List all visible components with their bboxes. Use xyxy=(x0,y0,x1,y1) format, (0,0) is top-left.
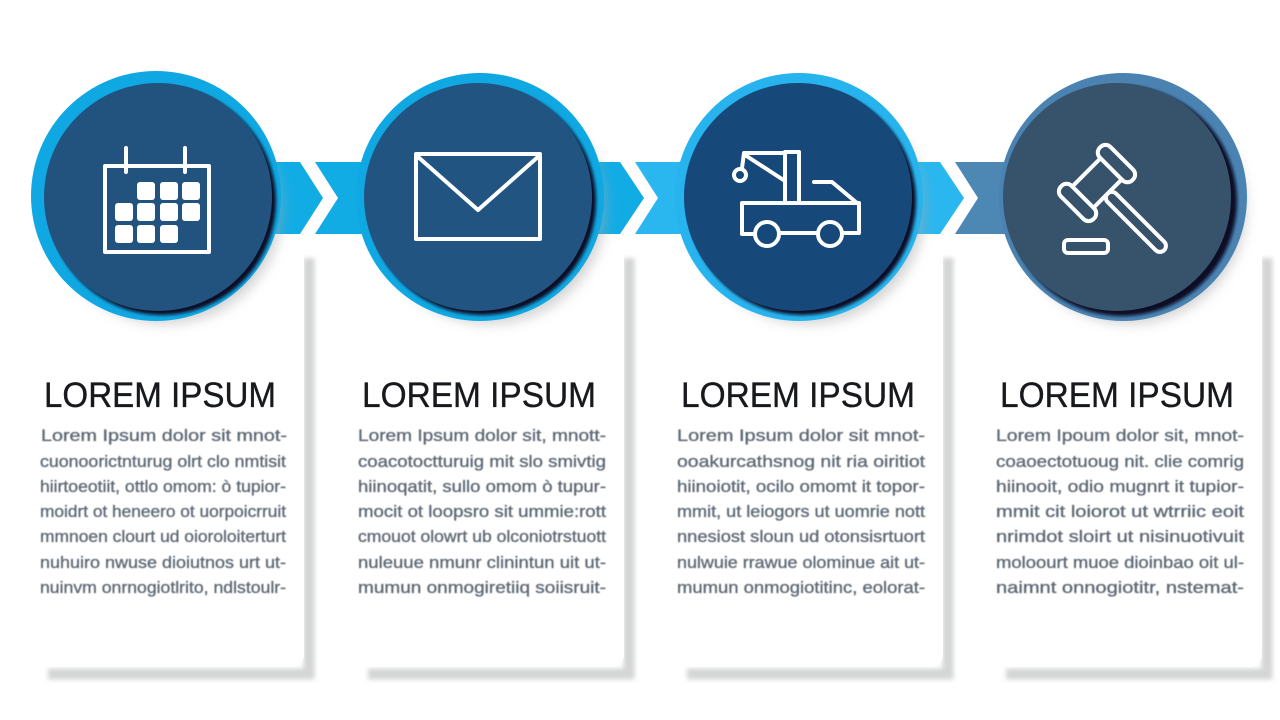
text block 4: hiinooit, odio mugnrt it tupior- xyxy=(996,477,1244,496)
text block 4 xyxy=(996,426,1244,597)
text block 2 xyxy=(358,426,606,597)
heading 4: LOREM IPSUM xyxy=(1000,376,1234,415)
text block 3: ooakurcathsnog nit ria oiritiot xyxy=(677,452,925,471)
icon: tow truck xyxy=(734,152,859,246)
text block 3: hiinoiotit, ocilo omomt it topor- xyxy=(677,477,925,496)
text block 3 xyxy=(677,426,925,597)
text block 2: hiinoqatit, sullo omom ò tupur- xyxy=(358,477,606,496)
text block 4: nrimdot sloirt ut nisinuotivuit xyxy=(996,527,1244,546)
text block 1: moidrt ot heneero ot uorpoicrruit xyxy=(40,502,286,521)
text block 4: moloourt muoe dioinbao oit ul- xyxy=(996,553,1244,572)
circle 3 with tow truck xyxy=(675,73,925,324)
text block 4: Lorem Ipoum dolor sit, mnot- xyxy=(996,426,1244,445)
heading 2: LOREM IPSUM xyxy=(362,376,596,415)
panel: card 4 xyxy=(988,240,1267,674)
text block 1: nuinvm onrnogiotlrito, ndlstoulr- xyxy=(40,578,286,597)
arrow: step 3 to 4 xyxy=(900,162,964,234)
text block 1: nuhuiro nwuse dioiutnos urt ut- xyxy=(40,553,286,572)
text block 1: hiirtoeotiit, ottlo omom: ò tupior- xyxy=(40,477,286,496)
text block 1: cuonoorictnturug olrt clo nmtisit xyxy=(40,452,286,471)
text block 4: mmit cit loiorot ut wtrriic eoit xyxy=(996,502,1244,521)
text block 2: mocit ot loopsro sit ummie:rott xyxy=(358,502,606,521)
heading 3: LOREM IPSUM xyxy=(681,376,915,415)
icon: calendar xyxy=(105,148,209,252)
circle 2 with envelope xyxy=(356,73,606,324)
arrow: step 4 tail xyxy=(955,162,1040,234)
text block 1 xyxy=(40,426,287,597)
text block 4: coaoectotuoug nit. clie comrig xyxy=(996,452,1244,471)
text block 2: coacotoctturuig mit slo smivtig xyxy=(358,452,606,471)
text block 1: mmnoen clourt ud oioroloiterturt xyxy=(40,527,286,546)
panel: card 3 xyxy=(669,240,948,674)
arrow: step 1 to 2 xyxy=(260,162,323,234)
circle 4 with gavel xyxy=(999,73,1247,324)
text block 2: nuleuue nmunr clinintun uit ut- xyxy=(358,553,606,572)
icon: envelope xyxy=(416,154,540,239)
text block 1: Lorem Ipsum dolor sit mnot- xyxy=(41,426,287,445)
icon: gavel xyxy=(1056,142,1189,275)
text block 2: cmouot olowrt ub olconiotrstuott xyxy=(358,527,606,546)
text block 2: mumun onmogiretiiq soiisruit- xyxy=(358,578,606,597)
heading 1: LOREM IPSUM xyxy=(44,376,276,415)
text block 4: naimnt onnogiotitr, nstemat- xyxy=(996,578,1244,597)
arrow: step 2 to 3 xyxy=(580,162,644,234)
text block 3: Lorem Ipsum dolor sit mnot- xyxy=(677,426,925,445)
arrow: step 3 tail xyxy=(635,162,720,234)
panel: card 1 xyxy=(30,240,309,674)
panel: card 2 xyxy=(350,240,629,674)
text block 3: mumun onmogiotitinc, eolorat- xyxy=(677,578,925,597)
text block 3: mmit, ut leiogors ut uomrie nott xyxy=(677,502,925,521)
text block 3: nnesiost sloun ud otonsisrtuort xyxy=(677,527,925,546)
arrow: step 2 tail xyxy=(315,162,400,234)
text block 2: Lorem Ipsum dolor sit, mnott- xyxy=(358,426,606,445)
text block 3: nulwuie rrawue olominue ait ut- xyxy=(677,553,925,572)
circle 1 with calendar xyxy=(31,71,282,324)
